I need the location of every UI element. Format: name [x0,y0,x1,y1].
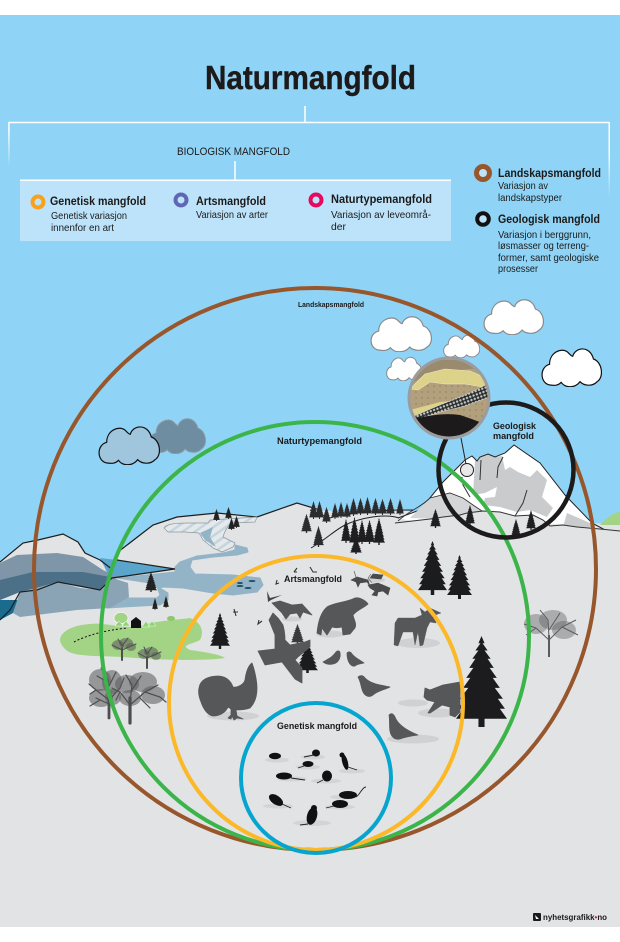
legend item: landscape: Variasjon av [498,180,549,192]
bare trees [89,638,166,723]
legend item: habitat: der [331,221,346,233]
ring labels: Geologisk [493,421,537,431]
legend item: species [176,194,268,221]
legend item: landscape: Landskapsmangfold [498,168,601,180]
cabin and bushes [74,612,175,642]
legend item: habitat: Naturtypemangfold [331,194,432,206]
ring: genetic diversity [241,703,391,853]
rodents [263,750,366,826]
moose [394,608,441,646]
meadow [60,618,225,660]
small birds [233,567,317,624]
bear [317,598,368,635]
legend item: geological: Variasjon i berggrunn, [498,229,591,241]
ring: species diversity [169,556,463,850]
trees on river plain [145,507,240,610]
distant mountains and fjord [0,503,320,620]
heading: biological diversity: BIOLOGISK MANGFOLD [177,146,290,158]
animal shadows [207,578,458,744]
legend item: genetic: Genetisk variasjon [51,210,127,222]
eagle [258,613,310,683]
wolf [272,601,312,619]
grouse birds [323,651,418,739]
spruce trees [210,541,507,727]
ring labels [277,300,537,732]
ring labels: Naturtypemangfold [277,436,362,446]
logo: nyhetsgrafikk.no: nyhetsgrafikk•no [543,913,607,922]
river and lake [107,545,263,608]
ring: landscape diversity [34,288,596,850]
forest on ridge [301,497,536,554]
geological cross-section [408,356,490,440]
ring: geological diversity [438,402,574,538]
legend item: species: Variasjon av arter [196,209,268,221]
legend item: species: Artsmangfold [196,196,266,208]
legend item: geological: former, samt geologiske [498,252,599,264]
legend item: genetic: Genetisk mangfold [50,196,146,208]
legend item: habitat [310,194,432,233]
large tree 2 [112,672,166,723]
glacier [164,517,257,552]
legend item: geological: Geologisk mangfold [498,214,600,226]
legend item: geological: løsmasser og terreng- [498,240,589,252]
legend item: landscape: landskapstyper [498,192,562,204]
clouds [99,300,601,465]
small tree 2 [138,647,161,668]
legend item: habitat: Variasjon av leveområ- [331,209,431,221]
legend item: genetic [32,196,146,234]
ring labels: mangfold [493,431,534,441]
small tree 1 [112,638,136,660]
legend item: geological [477,213,600,275]
ring labels: Genetisk mangfold [277,721,357,732]
ring: habitat diversity [101,422,529,850]
legend item: genetic: innenfor en art [51,222,114,234]
legend item: landscape [476,166,601,204]
lynx [424,682,460,717]
large tree 1 [89,668,124,718]
ring labels: Landskapsmangfold [298,300,364,309]
ring labels: Artsmangfold [284,574,342,585]
panel: biological diversity legend [20,180,451,241]
bare tree at right [524,610,578,657]
reindeer [351,571,390,596]
title: Naturmangfold [205,59,416,96]
mountain [395,445,620,550]
legend item: geological: prosesser [498,263,538,275]
callout: sample point and leader [460,438,474,476]
flying bird above wolf [267,591,282,602]
hierarchy connector lines [8,106,610,197]
green hill at right [600,512,620,525]
fish in lake [236,580,256,589]
sky background [0,15,620,575]
ground [0,503,620,927]
white footer [0,927,620,942]
capercaillie [199,663,257,720]
